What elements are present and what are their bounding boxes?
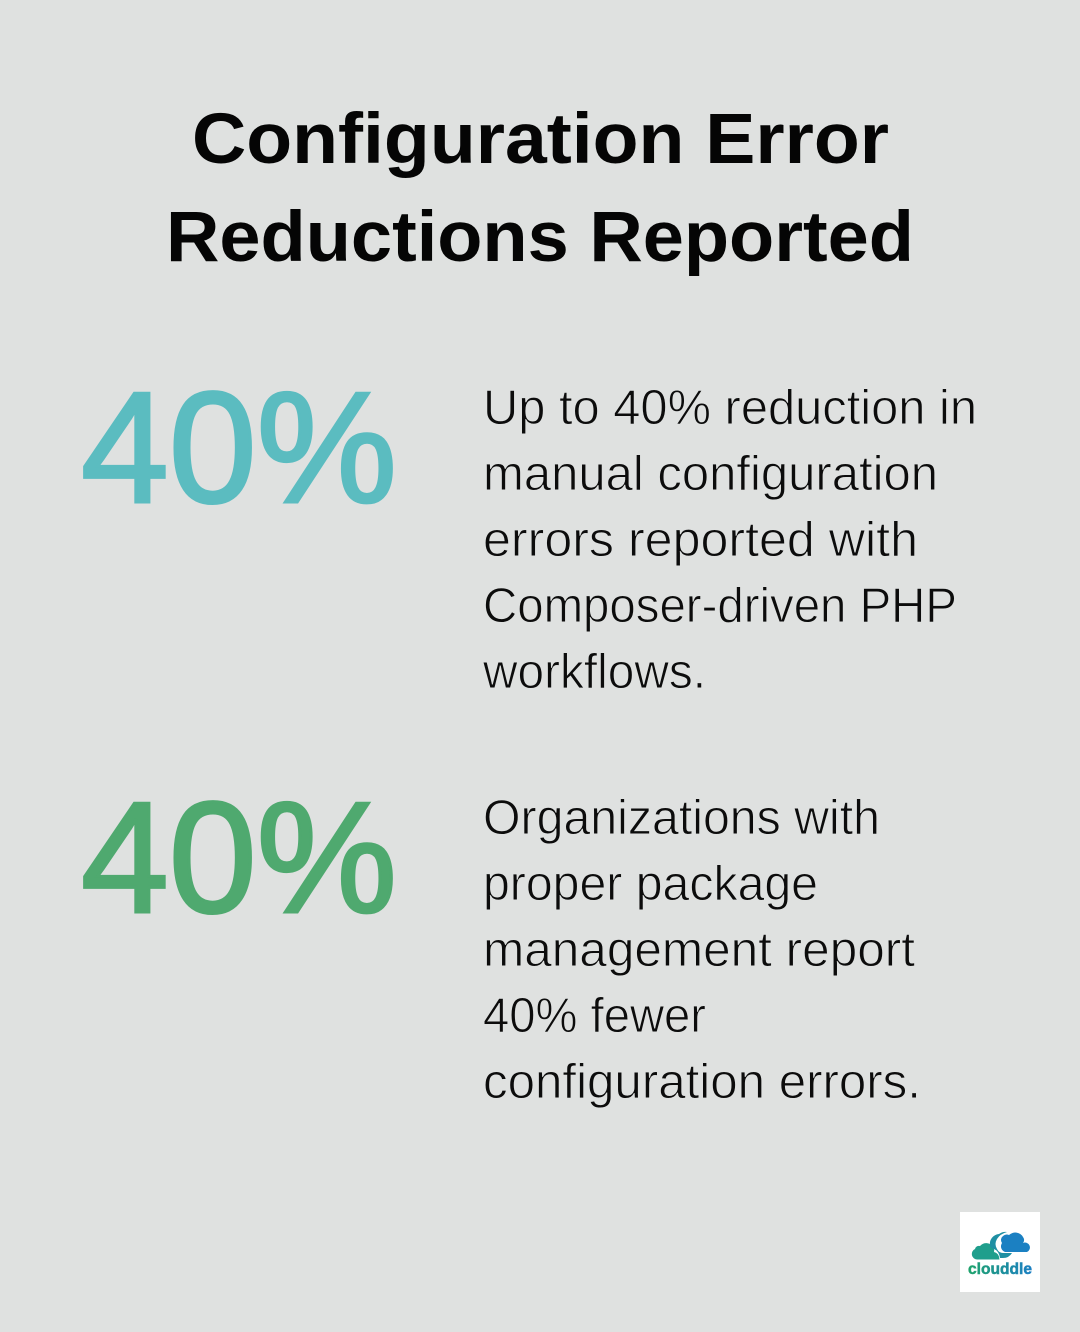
text block: package management: 40% fewer [483,989,706,1043]
big number: 40% teal: 40% [81,360,397,536]
title: Reductions Reported [166,198,914,277]
text block: package management: management report [483,923,915,977]
icon: left cloud [972,1243,1000,1260]
text block: manual configuration errors [482,381,977,699]
icon: right cloud [1001,1233,1030,1252]
text block: package management: proper package [483,857,818,911]
text block: manual configuration errors: Up to 40% reduction in [483,381,977,435]
text block: package management: configuration errors. [483,1055,921,1109]
text block: package management: Organizations with [483,791,880,845]
logo: clouddle [960,1212,1040,1292]
text block: manual configuration errors: errors reported with [483,513,918,567]
panel: first statistic [81,360,977,699]
wordmark: clouddle [968,1261,1032,1278]
title [166,100,914,277]
big number: 40% green: 40% [81,770,397,946]
text block: manual configuration errors: workflows. [482,645,706,699]
icon: middle crescent [990,1232,1012,1258]
text block: manual configuration errors: Composer-driven PHP [483,579,957,633]
text block: manual configuration errors: manual configuration [483,447,938,501]
text block: package management [483,791,921,1109]
title: Configuration Error [192,100,889,179]
panel: second statistic [81,770,921,1109]
